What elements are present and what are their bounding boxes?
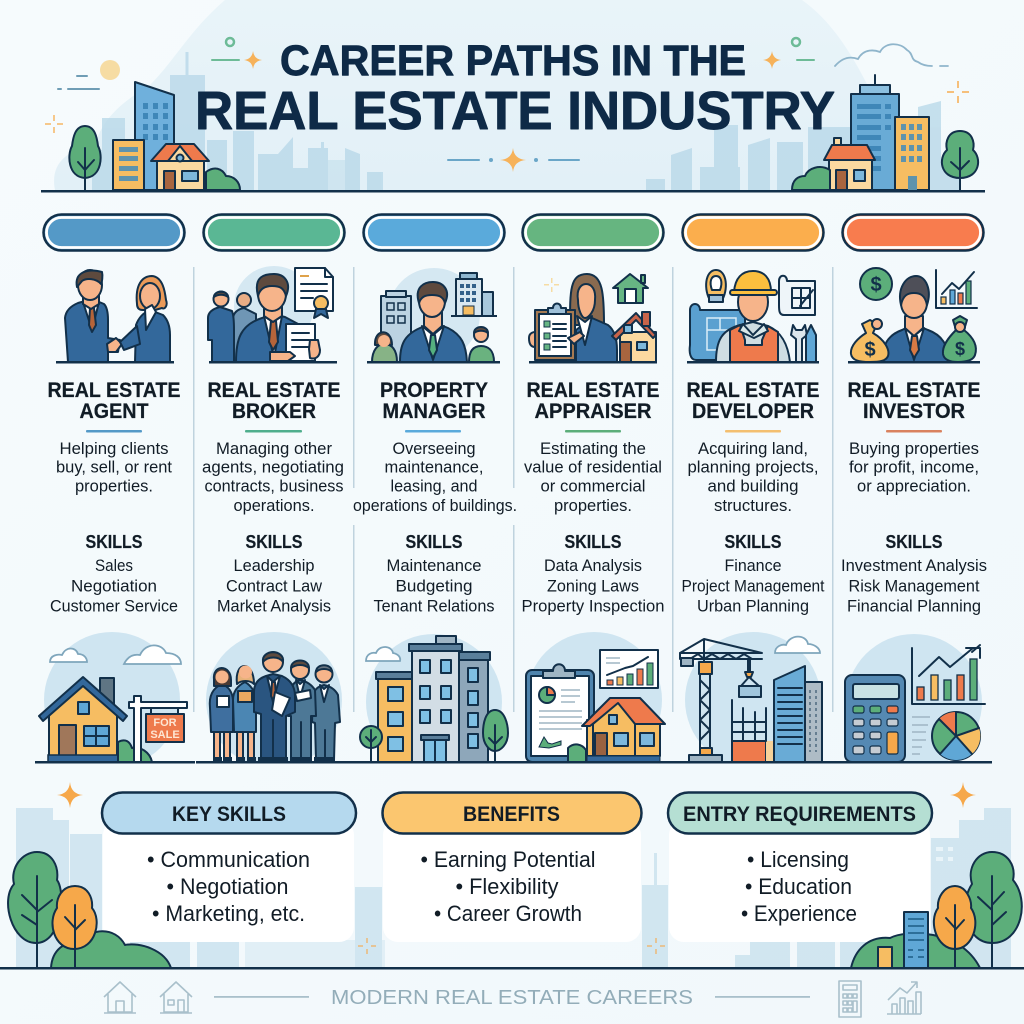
column: property manager: maintenance, — [384, 458, 484, 476]
right orange building — [895, 117, 929, 190]
lower background scene — [16, 782, 1011, 968]
right small building — [878, 947, 892, 968]
center dots — [489, 158, 538, 162]
column: real estate investor: INVESTOR — [863, 400, 965, 423]
column: real estate broker: Contract Law — [226, 576, 323, 596]
description: Estimating the — [540, 439, 646, 458]
heading: REAL ESTATE — [526, 379, 660, 402]
benefits card body — [383, 820, 641, 942]
column: real estate developer: Project Management — [682, 576, 825, 596]
right tower — [851, 75, 899, 190]
illustration: business team — [196, 632, 356, 768]
panel: key skills: • Negotiation — [166, 874, 288, 899]
skills: SKILLS — [406, 531, 462, 552]
benefits header pill — [382, 792, 642, 834]
description: Acquiring land, — [698, 439, 808, 458]
illustration: apartment buildings — [356, 634, 516, 770]
column: real estate developer: planning projects, — [688, 458, 818, 476]
column: property manager: operations of buildings. — [353, 496, 517, 515]
sparkle marks — [45, 51, 969, 172]
column: property manager: Maintenance — [386, 556, 482, 575]
accent rule — [405, 430, 461, 432]
team member woman left — [210, 668, 233, 758]
column: real estate developer: DEVELOPER — [692, 400, 814, 423]
right blue building — [904, 912, 928, 968]
illustration: crane and towers — [676, 632, 836, 768]
column: real estate broker: Leadership — [234, 556, 314, 575]
header ground line — [41, 190, 985, 192]
column: real estate appraiser: or commercial — [540, 476, 646, 496]
description: Helping clients — [60, 439, 168, 458]
entry heading: ENTRY REQUIREMENTS — [683, 802, 916, 826]
column: real estate developer: Finance — [724, 556, 782, 575]
left tree — [69, 126, 101, 190]
column: real estate broker: contracts, business — [204, 476, 344, 496]
benefits list: • Earning Potential — [420, 847, 596, 872]
panel: benefits — [382, 792, 642, 942]
skills: SKILLS — [86, 531, 142, 552]
agent pill — [44, 214, 184, 250]
column: real estate agent: Customer Service — [50, 596, 178, 616]
column: real estate investor: Financial Planning — [847, 596, 981, 616]
icon: investor with money bags — [848, 268, 980, 364]
left orange tree — [52, 886, 97, 968]
agent pill inner gap — [46, 218, 182, 248]
column: real estate appraiser: value of residential — [524, 458, 662, 476]
title — [195, 37, 835, 141]
manager pill — [364, 214, 504, 250]
skills: SKILLS — [724, 531, 782, 552]
column: real estate appraiser — [516, 214, 676, 768]
icon: property manager — [367, 268, 500, 364]
illustration: house for sale: SALE — [150, 729, 180, 741]
illustration: appraisal report and house — [516, 632, 676, 768]
developer pill — [682, 214, 824, 250]
left skyline silhouettes — [92, 52, 383, 190]
footer icon: house outline — [160, 982, 192, 1013]
right orange tree — [934, 886, 975, 968]
column: property manager: MANAGER — [382, 400, 486, 423]
investor pill inner gap — [846, 218, 980, 248]
left tower — [135, 82, 174, 190]
icon: handshake — [56, 270, 174, 364]
accent rule — [725, 430, 781, 432]
column: real estate broker: BROKER — [232, 400, 316, 423]
description: Buying properties — [849, 439, 979, 458]
key skills card body — [103, 820, 354, 942]
column: real estate developer: Urban Planning — [697, 596, 809, 616]
panel: entry requirements — [668, 792, 932, 942]
left bush — [51, 931, 171, 968]
column: real estate agent: properties. — [75, 476, 153, 496]
team feet — [213, 757, 335, 761]
column: real estate broker: agents, negotiating — [202, 458, 344, 476]
illustration: house for sale — [35, 632, 195, 768]
appraiser pill inner gap — [526, 218, 660, 248]
column: real estate broker: Market Analysis — [217, 596, 331, 616]
icon: investor with money bags: $ — [870, 274, 882, 296]
icon: broker with document — [208, 266, 337, 364]
lower skyline silhouettes — [16, 808, 1011, 968]
column: real estate developer: and building — [708, 476, 798, 496]
column: real estate developer: structures. — [714, 496, 792, 515]
panel: key skills: • Marketing, etc. — [152, 901, 305, 926]
footer icon: house — [104, 982, 136, 1013]
description: Overseeing — [392, 439, 476, 458]
entry header pill — [668, 792, 932, 834]
panel: benefits: • Career Growth — [434, 901, 582, 926]
broker pill — [204, 214, 344, 250]
icon: investor with money bags: $ — [864, 339, 876, 361]
footer icon: calculator — [839, 981, 861, 1017]
footer rule right — [715, 996, 810, 998]
heading: REAL ESTATE — [848, 379, 980, 402]
heading: PROPERTY — [380, 379, 488, 402]
title line 1: CAREER PATHS IN THE — [280, 37, 746, 85]
left orange building — [113, 140, 144, 190]
key skills header pill — [102, 792, 356, 834]
right bush — [851, 933, 980, 968]
footer rule left — [214, 996, 309, 998]
column: real estate agent: buy, sell, or rent — [56, 458, 172, 476]
column: real estate appraiser: Zoning Laws — [547, 576, 639, 596]
column: property manager — [353, 214, 517, 770]
right skyline silhouettes — [646, 101, 961, 190]
heading: REAL ESTATE — [686, 379, 820, 402]
description: Managing other — [216, 439, 332, 458]
column: real estate appraiser: properties. — [554, 496, 632, 515]
column: real estate agent: Negotiation — [71, 576, 157, 596]
column dividers — [193, 267, 834, 712]
header illustration: skyline band — [41, 0, 985, 192]
team member right — [288, 660, 316, 760]
sun — [100, 60, 120, 80]
accent rule — [565, 430, 621, 432]
right bush — [792, 167, 830, 190]
left house — [151, 144, 209, 190]
column: real estate investor: or appreciation. — [857, 476, 971, 496]
column: real estate agent — [35, 214, 195, 768]
panel: entry requirements: • Education — [745, 874, 852, 899]
key skills list: • Communication — [147, 847, 310, 872]
illustration: calculator and charts — [836, 634, 992, 770]
right tree — [942, 131, 978, 190]
column: property manager: Budgeting — [396, 576, 472, 596]
right green tree — [965, 852, 1022, 968]
team member woman centre — [233, 666, 256, 758]
small windows — [936, 847, 953, 861]
heading: REAL ESTATE — [208, 379, 340, 402]
team lead — [254, 652, 295, 760]
broker pill inner gap — [206, 218, 342, 248]
panel: benefits: • Flexibility — [456, 874, 559, 899]
column: real estate appraiser: APPRAISER — [534, 400, 652, 423]
lower ground line — [0, 967, 1024, 970]
column: real estate investor: Risk Management — [848, 576, 980, 596]
footer text: MODERN REAL ESTATE CAREERS — [331, 987, 693, 1009]
header background blob — [54, 0, 925, 190]
entry list: • Licensing — [747, 847, 849, 872]
team member far right — [312, 665, 340, 760]
column: real estate developer — [676, 214, 836, 768]
investor pill — [842, 214, 984, 250]
developer pill inner gap — [686, 218, 820, 248]
foreground plants — [8, 852, 1022, 968]
column: real estate agent: AGENT — [80, 400, 149, 423]
icon: appraiser with clipboard — [529, 274, 657, 364]
left green tree — [8, 852, 61, 968]
panel: key skills — [102, 792, 356, 942]
lower sparkles — [57, 782, 976, 954]
footer — [104, 981, 921, 1017]
column: real estate investor: Investment Analysis — [841, 556, 987, 575]
cloud outline — [835, 44, 948, 66]
column: real estate investor: for profit, income, — [849, 458, 979, 476]
entry card body — [669, 820, 930, 942]
manager pill inner gap — [366, 218, 502, 248]
panel: entry requirements: • Experience — [741, 901, 857, 926]
benefits heading: BENEFITS — [463, 802, 560, 826]
left bush — [206, 169, 240, 190]
icon: developer with helmet — [687, 270, 819, 364]
skills: SKILLS — [886, 531, 942, 552]
icon: investor with money bags: $ — [955, 339, 965, 359]
column: real estate appraiser: Data Analysis — [544, 556, 642, 575]
right house — [824, 138, 875, 190]
column: real estate broker — [196, 214, 356, 768]
accent rule — [86, 430, 142, 432]
column: real estate agent: Sales — [95, 556, 133, 575]
illustration: house for sale: FOR — [153, 717, 177, 729]
skills: SKILLS — [246, 531, 302, 552]
column: real estate investor — [836, 214, 992, 770]
appraiser pill — [522, 214, 664, 250]
accent rule — [245, 430, 302, 432]
skills: SKILLS — [564, 531, 622, 552]
key skills heading: KEY SKILLS — [172, 802, 286, 826]
column: real estate appraiser: Property Inspection — [522, 596, 664, 616]
title line 2: REAL ESTATE INDUSTRY — [195, 81, 835, 141]
column: real estate broker: operations. — [234, 496, 314, 515]
heading: REAL ESTATE — [48, 379, 180, 402]
column: property manager: leasing, and — [390, 476, 478, 496]
column: property manager: Tenant Relations — [374, 596, 494, 616]
footer icon: chart — [887, 982, 921, 1014]
decorative dashes and marks — [58, 38, 814, 160]
accent rule — [886, 430, 942, 432]
